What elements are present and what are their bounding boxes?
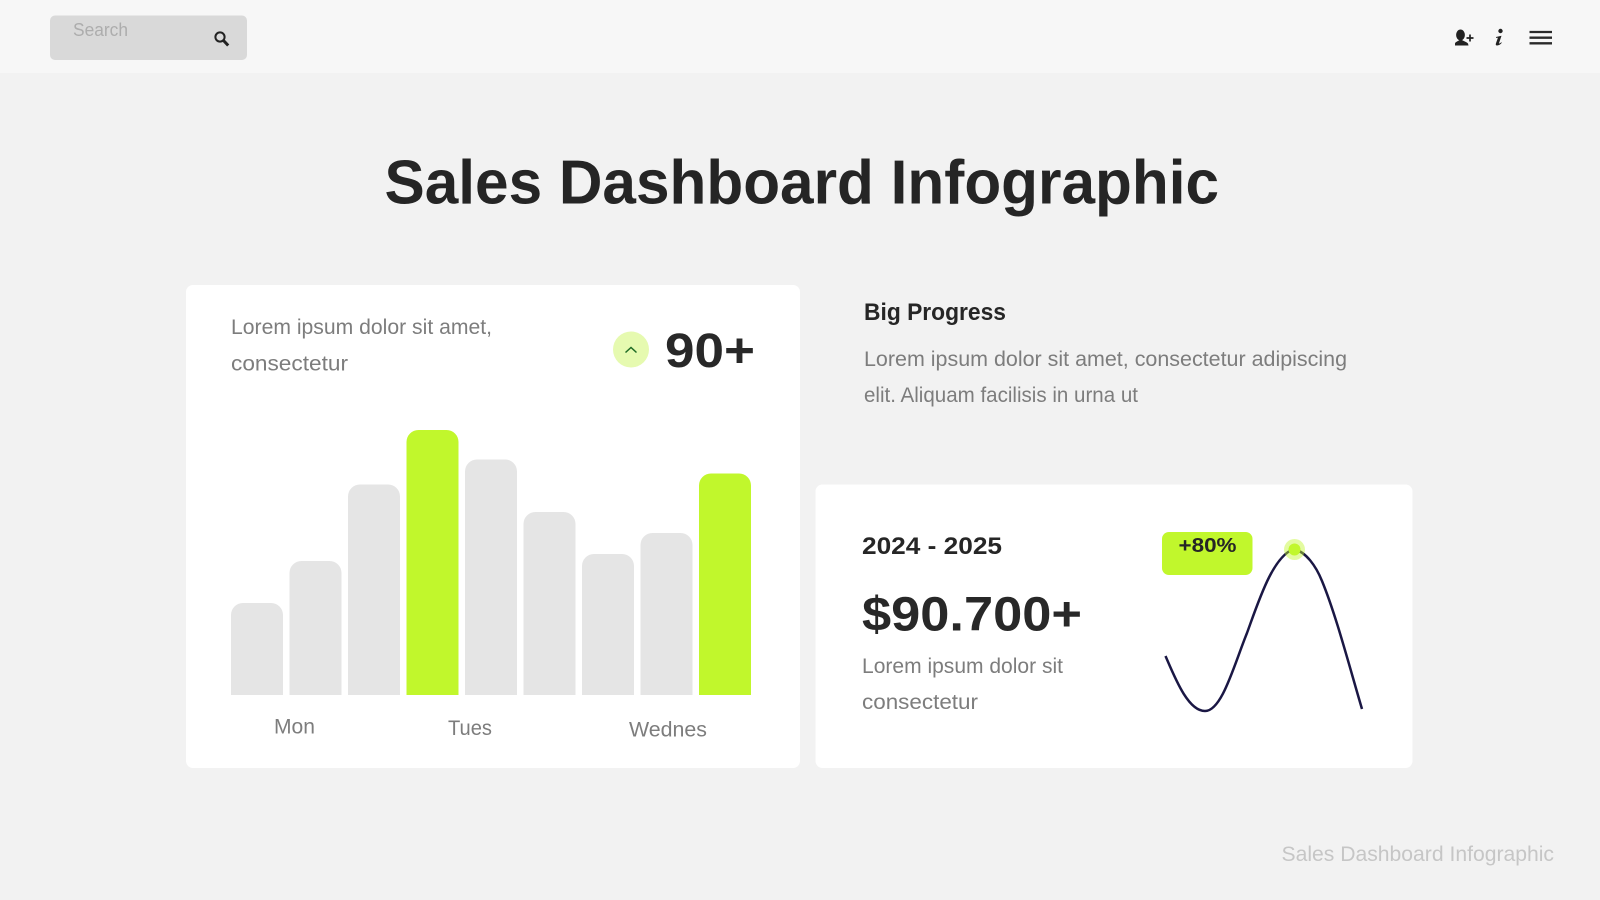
description text <box>231 316 492 376</box>
bar chart <box>231 430 751 695</box>
icon: menu <box>1530 32 1552 43</box>
description text: Lorem ipsum dolor sit amet, <box>231 316 492 339</box>
panel: revenue card <box>816 484 1412 768</box>
description text: consectetur <box>231 352 348 376</box>
stat: 90+: 90+ <box>665 325 755 378</box>
search box: Search <box>73 20 128 40</box>
badge: +80% <box>1162 532 1252 575</box>
icon: add user <box>1455 30 1474 46</box>
date range: 2024 - 2025 <box>862 533 1002 560</box>
text block: big progress <box>864 299 1347 407</box>
icon: info <box>1496 29 1503 46</box>
axis labels: Mon <box>274 716 315 738</box>
description text: Lorem ipsum dolor sit <box>862 655 1063 678</box>
text block: big progress: Big Progress <box>864 299 1006 326</box>
axis labels <box>274 716 707 742</box>
stat: revenue: $90.700+ <box>862 588 1082 642</box>
axis labels: Wednes <box>629 718 707 742</box>
description text: consectetur <box>862 691 978 714</box>
text block: big progress: Lorem ipsum dolor sit amet, consectetur adipiscing <box>864 348 1347 371</box>
badge: +80%: +80% <box>1178 535 1237 557</box>
icon: up arrow badge <box>613 332 649 368</box>
line chart <box>1166 539 1362 711</box>
panel: bar chart card <box>186 285 800 768</box>
footer caption: Sales Dashboard Infographic <box>1282 843 1554 866</box>
axis labels: Tues <box>448 717 492 740</box>
title: Sales Dashboard Infographic <box>384 148 1219 218</box>
text block: big progress: elit. Aliquam facilisis in urna ut <box>864 384 1138 407</box>
description text <box>862 655 1063 714</box>
top navigation bar <box>0 0 1600 73</box>
search box <box>50 16 247 60</box>
